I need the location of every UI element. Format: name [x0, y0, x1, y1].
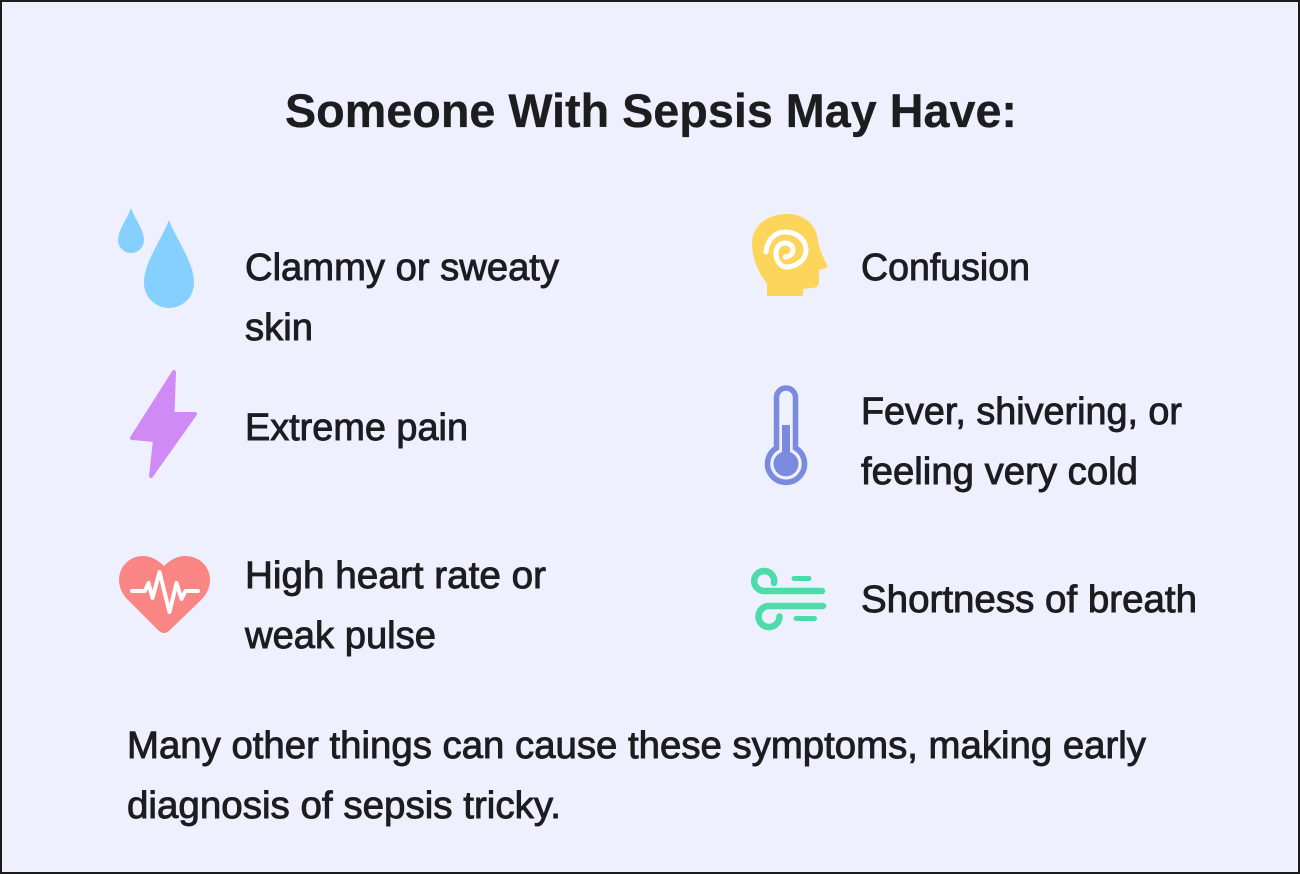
- text: clammy or sweaty skin: Clammy or sweaty: [245, 247, 559, 289]
- text: fever, shivering, or feeling very cold: feeling very cold: [861, 451, 1138, 493]
- icon: sweat drops: [118, 208, 194, 308]
- icon: head with spiral: [752, 214, 827, 296]
- text: high heart rate or weak pulse: High heart rate or: [245, 555, 546, 597]
- text: extreme pain: Extreme pain: [245, 407, 468, 449]
- icon: wind: [754, 571, 823, 627]
- icon: thermometer: [768, 388, 804, 482]
- text: closing note: diagnosis of sepsis tricky.: [127, 785, 561, 827]
- text: clammy or sweaty skin: [245, 247, 559, 349]
- title: Someone With Sepsis May Have:: [285, 84, 1017, 137]
- text: shortness of breath: Shortness of breath: [861, 579, 1197, 621]
- text: closing note: Many other things can cause these symptoms, making early: [127, 725, 1146, 767]
- icon: lightning bolt: [132, 372, 195, 476]
- text: clammy or sweaty skin: skin: [245, 307, 313, 349]
- icon: heart with pulse: [119, 556, 210, 633]
- text: confusion: Confusion: [861, 247, 1030, 289]
- text: fever, shivering, or feeling very cold: [861, 391, 1182, 493]
- text: fever, shivering, or feeling very cold: Fever, shivering, or: [861, 391, 1182, 433]
- text: closing note: [127, 725, 1146, 827]
- text: high heart rate or weak pulse: [244, 555, 546, 657]
- text: high heart rate or weak pulse: weak pulse: [244, 615, 436, 657]
